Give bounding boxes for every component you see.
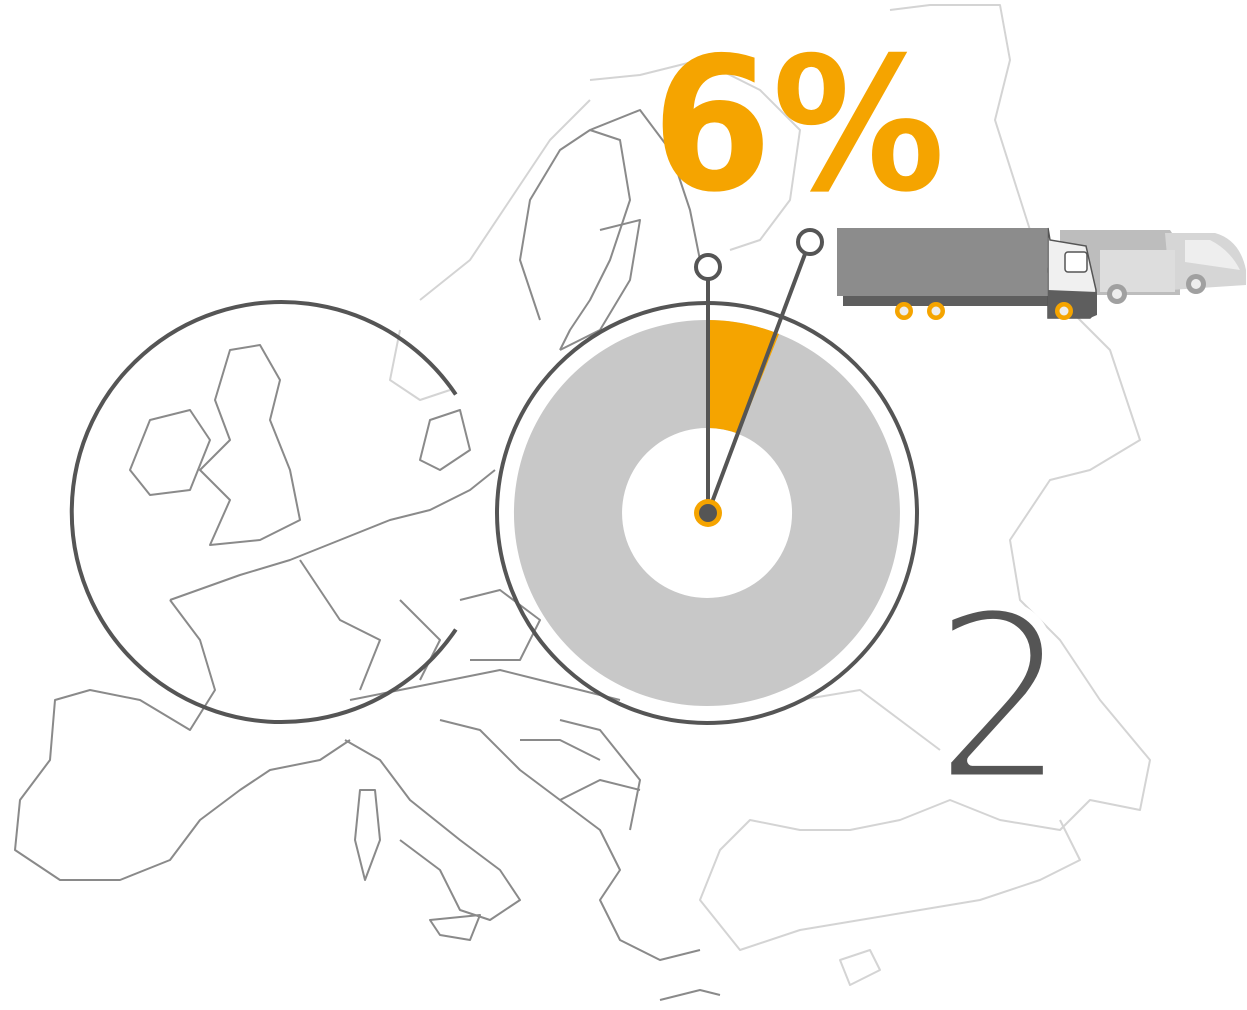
pin lines <box>696 230 822 513</box>
icon: bus <box>1060 230 1246 304</box>
right circle ring <box>497 303 917 723</box>
donut chart <box>514 320 900 706</box>
icon: truck <box>837 228 1097 320</box>
center dot <box>694 499 722 527</box>
left circle (open arc) <box>72 302 456 722</box>
donut orange slice 6% <box>707 320 779 434</box>
number 2: 2 <box>930 561 1070 836</box>
headline 6%: 6% <box>652 17 945 233</box>
